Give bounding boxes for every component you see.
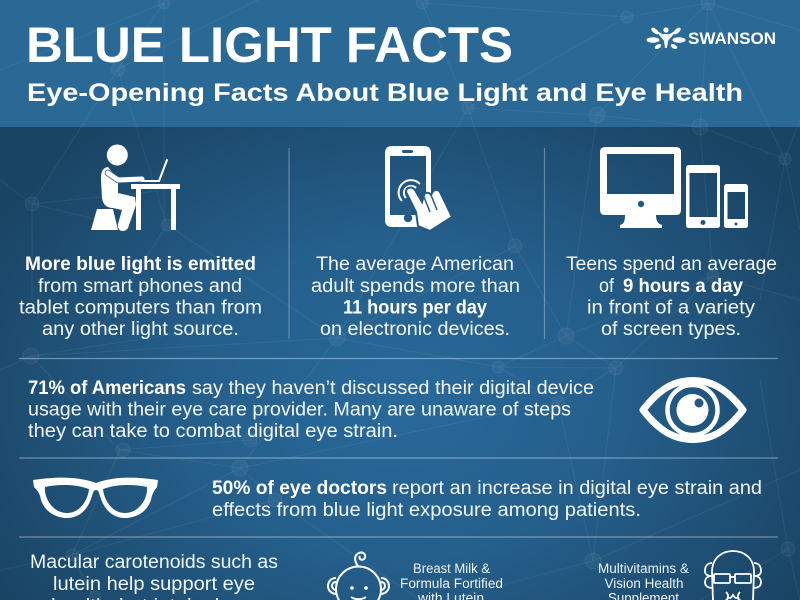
- text: 9 hours a day: 9 hours a day: [623, 276, 743, 297]
- text: 9 hours a day: [566, 254, 777, 340]
- text: 71 percent of Americans: say they haven’t discussed their digital device: [192, 378, 594, 399]
- text: more blue light: tablet computers than from: [19, 298, 262, 318]
- text: breast milk and formula: Breast Milk &: [413, 561, 490, 576]
- text: 50 percent of eye doctors: 50% of eye doctors: [212, 478, 387, 499]
- column dividers: [289, 148, 544, 339]
- text: 11 hours per day: on electronic devices.: [320, 319, 510, 340]
- icon: person at laptop: [91, 144, 180, 231]
- text: multivitamins and supplement: Multivitamins &: [598, 561, 689, 576]
- text: breast milk and formula: [400, 561, 503, 600]
- text: macular carotenoids: Macular carotenoids such as: [30, 552, 278, 573]
- icon: baby face: [328, 553, 389, 600]
- text: macular carotenoids: [30, 552, 278, 600]
- text: 71 percent of Americans: they can take to combat digital eye strain.: [28, 421, 398, 442]
- logo: Swanson: SWANSON: [688, 29, 776, 48]
- text: 9 hours a day: in front of a variety: [587, 298, 756, 318]
- text: more blue light: [19, 254, 262, 340]
- text: 11 hours per day: 11 hours per day: [343, 298, 487, 318]
- text: 50 percent of eye doctors: report an increase in digital eye strain and: [392, 478, 762, 499]
- text: multivitamins and supplement: Vision Health: [604, 576, 684, 591]
- text: 9 hours a day: of screen types.: [601, 319, 741, 340]
- logo: Swanson: [646, 26, 776, 50]
- text: breast milk and formula: Formula Fortified: [400, 576, 503, 591]
- icon: glasses: [33, 478, 158, 518]
- text: 71 percent of Americans: 71% of Americans: [28, 378, 186, 399]
- text: 71 percent of Americans: usage with their eye care provider. Many are unaware of steps: [28, 400, 571, 421]
- text: 11 hours per day: adult spends more than: [311, 276, 520, 297]
- icon: phone with touching hand: [385, 146, 452, 231]
- text: 50 percent of eye doctors: effects from blue light exposure among patients.: [212, 500, 641, 521]
- icon: monitor, tablet and phone: [600, 147, 748, 228]
- text: more blue light: any other light source.: [42, 319, 239, 340]
- icon: eye: [643, 380, 743, 440]
- icon: older man face: [705, 551, 761, 600]
- row dividers: [19, 358, 778, 537]
- text: 9 hours a day: of: [599, 276, 615, 297]
- text: 50 percent of eye doctors: [212, 478, 762, 521]
- subtitle: Eye-Opening Facts About Blue Light and Eye Health: [27, 79, 743, 107]
- title: BLUE LIGHT FACTS: [26, 17, 513, 73]
- text: 71 percent of Americans: [28, 378, 594, 442]
- text: 9 hours a day: Teens spend an average: [566, 254, 777, 275]
- text: more blue light: More blue light is emitted: [25, 254, 256, 275]
- text: multivitamins and supplement: [598, 561, 689, 600]
- text: more blue light: from smart phones and: [38, 276, 242, 297]
- header band: [0, 0, 800, 127]
- text: 11 hours per day: [311, 254, 520, 340]
- text: 11 hours per day: The average American: [316, 254, 514, 275]
- text: macular carotenoids: lutein help support eye: [53, 574, 255, 595]
